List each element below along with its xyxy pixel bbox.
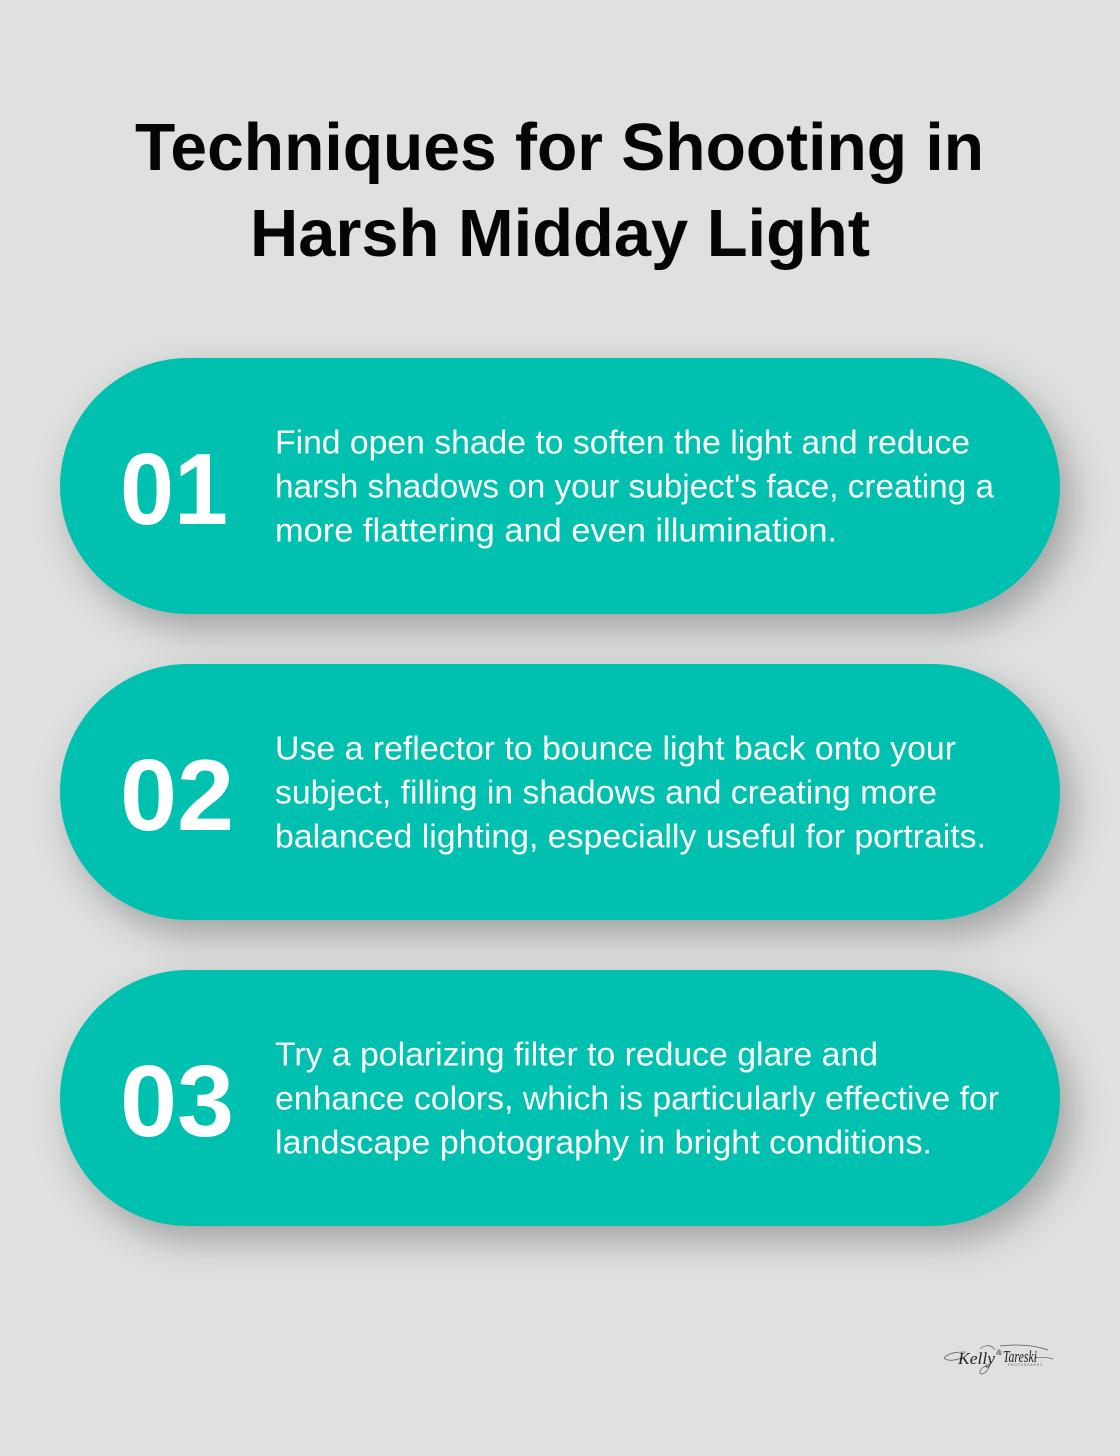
text: step 03 description <box>275 1036 999 1160</box>
text: step 01 description <box>275 424 995 548</box>
logo: signature: & <box>996 1348 1003 1357</box>
text: step 02 description <box>275 730 986 854</box>
title <box>135 110 984 271</box>
title: Techniques for Shooting in <box>135 110 984 185</box>
text: step 02 description: balanced lighting, especially useful for portraits. <box>275 818 986 854</box>
text: step 03 description: enhance colors, which is particularly effective for <box>275 1080 999 1116</box>
text: step 02 description: subject, filling in shadows and creating more <box>275 774 937 810</box>
logo: signature: PHOTOGRAPHY <box>1008 1363 1043 1367</box>
text: step 02 description: Use a reflector to bounce light back onto your <box>275 730 956 766</box>
logo: signature: Kelly <box>957 1349 995 1368</box>
title: Harsh Midday Light <box>250 196 870 271</box>
logo: signature <box>944 1345 1053 1374</box>
text: step 03 description: Try a polarizing filter to reduce glare and <box>275 1036 878 1072</box>
number 03: 03 <box>120 1046 234 1158</box>
number 01: 01 <box>120 434 228 546</box>
text: step 01 description: harsh shadows on your subject's face, creating a <box>275 468 995 504</box>
text: step 01 description: Find open shade to soften the light and reduce <box>275 424 970 460</box>
panel: step 01 <box>60 358 1060 614</box>
panel: step 03 <box>60 970 1060 1226</box>
text: step 01 description: more flattering and even illumination. <box>275 512 837 548</box>
panel: step 02 <box>60 664 1060 920</box>
text: step 03 description: landscape photography in bright conditions. <box>275 1124 932 1160</box>
logo: signature: Tareski <box>1003 1347 1037 1366</box>
number 02: 02 <box>120 740 234 852</box>
